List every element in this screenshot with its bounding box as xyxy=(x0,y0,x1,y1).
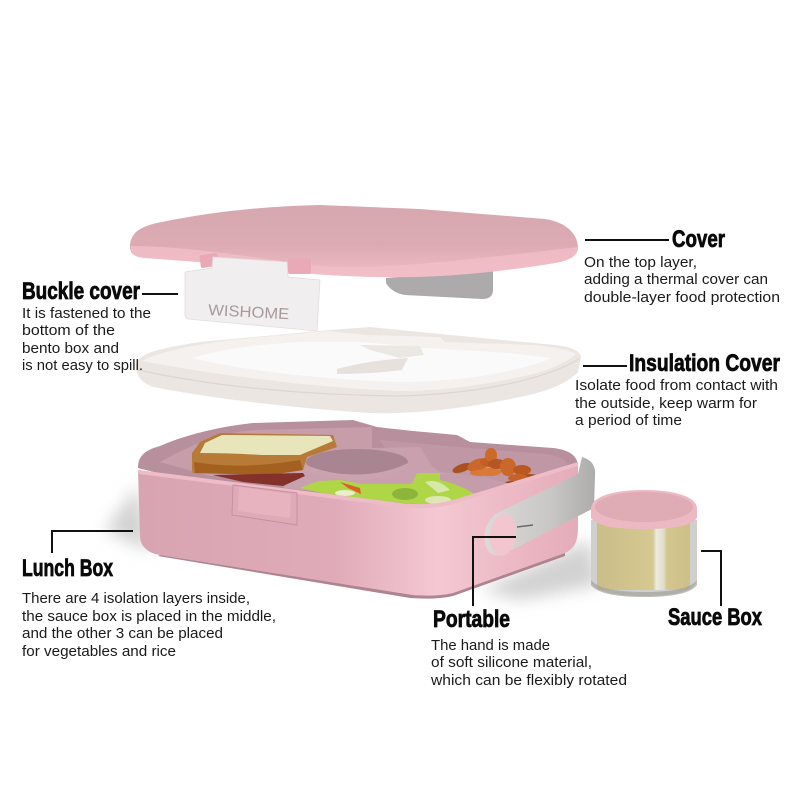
callout: Portable: The hand is made xyxy=(431,637,550,654)
illustration: insulation cover xyxy=(136,327,581,413)
strap hinge button xyxy=(487,512,519,558)
callout: Portable: of soft silicone material, xyxy=(431,654,592,671)
callout: Portable: Portable xyxy=(433,606,510,633)
right compartment xyxy=(380,440,568,490)
callout: Portable xyxy=(430,537,627,689)
sandwich xyxy=(192,433,337,486)
centre sauce well xyxy=(283,447,510,502)
callout: Lunch Box: for vegetables and rice xyxy=(22,643,176,660)
left compartment wall xyxy=(160,427,372,476)
callout: Insulation Cover: a period of time xyxy=(575,412,682,429)
almonds xyxy=(451,448,539,487)
callout: Buckle cover: It is fastened to the xyxy=(22,305,151,322)
callout: Cover: Cover xyxy=(672,226,725,253)
callout: Insulation Cover xyxy=(575,350,780,429)
callout: Sauce Box: Sauce Box xyxy=(668,604,762,631)
illustration: buckle cover with WISHOME logo xyxy=(185,253,320,331)
callout: Cover: double-layer food protection xyxy=(584,289,780,306)
callout: Insulation Cover: the outside, keep warm for xyxy=(575,395,757,412)
right tray divider xyxy=(440,474,510,496)
callout: Buckle cover: is not easy to spill. xyxy=(22,357,143,374)
box body xyxy=(138,462,578,596)
callout: Cover: On the top layer, xyxy=(584,254,697,271)
callout: Lunch Box: There are 4 isolation layers inside, xyxy=(22,590,250,607)
WISHOME wordmark: WISHOME xyxy=(208,302,290,323)
callout: Buckle cover: bento box and xyxy=(22,340,119,357)
box interior xyxy=(138,420,578,510)
illustration: top cover lid xyxy=(130,205,578,299)
callout: Lunch Box: the sauce box is placed in the middle, xyxy=(22,608,276,625)
callout: Lunch Box: and the other 3 can be placed xyxy=(22,625,223,642)
callout: Portable: which can be flexibly rotated xyxy=(430,672,627,689)
salad xyxy=(300,473,478,505)
illustration: lunch box xyxy=(138,420,578,599)
background shadows xyxy=(105,485,600,600)
illustration: portable strap handle xyxy=(484,457,595,558)
callout: Buckle cover xyxy=(22,278,178,374)
callout: Sauce Box xyxy=(668,551,762,631)
callout: Lunch Box: Lunch Box xyxy=(22,555,113,582)
illustration: sauce box xyxy=(591,490,697,597)
callout: Buckle cover: bottom of the xyxy=(22,322,115,339)
callout: Cover: adding a thermal cover can xyxy=(584,271,768,288)
callout: Lunch Box xyxy=(22,531,276,660)
front buckle clasp xyxy=(232,485,297,525)
callout: Insulation Cover: Isolate food from contact with xyxy=(575,377,778,394)
callout: Buckle cover: Buckle cover xyxy=(22,278,140,305)
callout: Cover xyxy=(584,226,780,306)
